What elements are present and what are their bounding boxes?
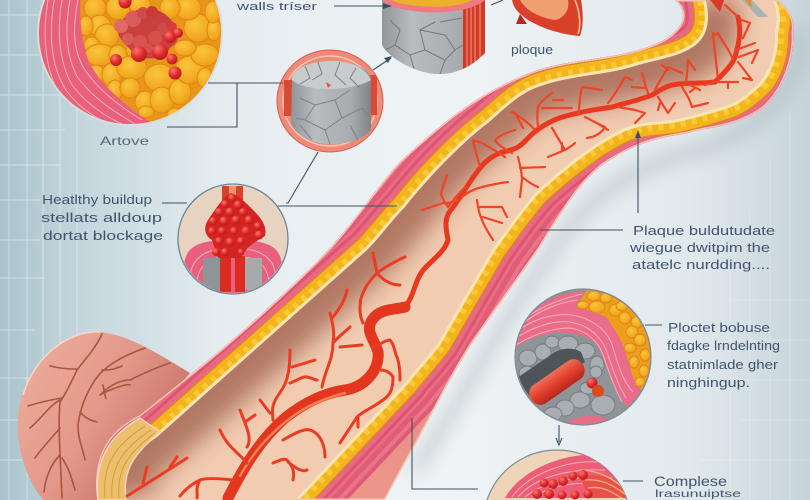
shadow under artery: [415, 30, 800, 470]
text block: plaque buildup: wiegue dwitpim the: [629, 240, 770, 255]
text block: plaque rupture: [667, 320, 780, 390]
leader lines and arrows: [162, 0, 662, 489]
icon: outer cylinder of artery: [18, 332, 190, 500]
muscle band: [510, 290, 642, 407]
panel: healthy buildup circle: [175, 184, 290, 300]
icon: heart: [512, 0, 583, 36]
cut face of wall: [97, 418, 160, 500]
label: plaque: plοque: [511, 43, 553, 57]
gray cylinder: [291, 61, 371, 144]
text block: healthy buildup: Heatlthy buildup: [42, 192, 152, 207]
panel: blocked vessel circle: [514, 288, 652, 426]
muscle wall: [39, 0, 150, 124]
panel: complete blockage circle: [487, 450, 640, 500]
text block: healthy buildup: dortat blockage: [43, 228, 163, 243]
text block: plaque buildup: Plaque buldutudate: [633, 223, 775, 238]
fat cells: [79, 0, 221, 122]
text block: plaque rupture: fdagke lrndelnting: [667, 338, 780, 353]
text block: plaque buildup: atatelc nurdding....: [632, 257, 770, 272]
label: artery: Artove: [100, 134, 149, 148]
plaque cluster: [110, 0, 183, 80]
text block: plaque rupture: statnimlade gher: [667, 357, 779, 372]
panel: gray plaque cylinder circle: [277, 50, 383, 152]
panel: fatty plaque magnified circle: [30, 0, 222, 135]
red vessels: [127, 5, 758, 498]
text block: healthy buildup: [41, 192, 163, 243]
text block: plaque rupture: Ploctet bobuse: [668, 320, 770, 335]
red clot: [532, 470, 592, 500]
text block: plaque rupture: ninghingup.: [667, 375, 750, 390]
fat cells: [576, 290, 650, 390]
text block: complete blockage: Complese: [654, 473, 727, 489]
panel: top cylinder cross-section: [380, 0, 487, 75]
red clot cluster: [205, 193, 266, 258]
gray rock texture: [519, 336, 615, 421]
text block: complete blockage: lrasunuiptse: [655, 489, 742, 500]
small vessel detail top right: [710, 0, 768, 17]
text block: complete blockage: [654, 473, 742, 500]
red vessel tube: [529, 359, 604, 405]
text block: healthy buildup: stellats alldoup: [41, 210, 162, 225]
text block: plaque buildup: [629, 223, 775, 272]
label: walls: walls tríser: [235, 1, 318, 13]
